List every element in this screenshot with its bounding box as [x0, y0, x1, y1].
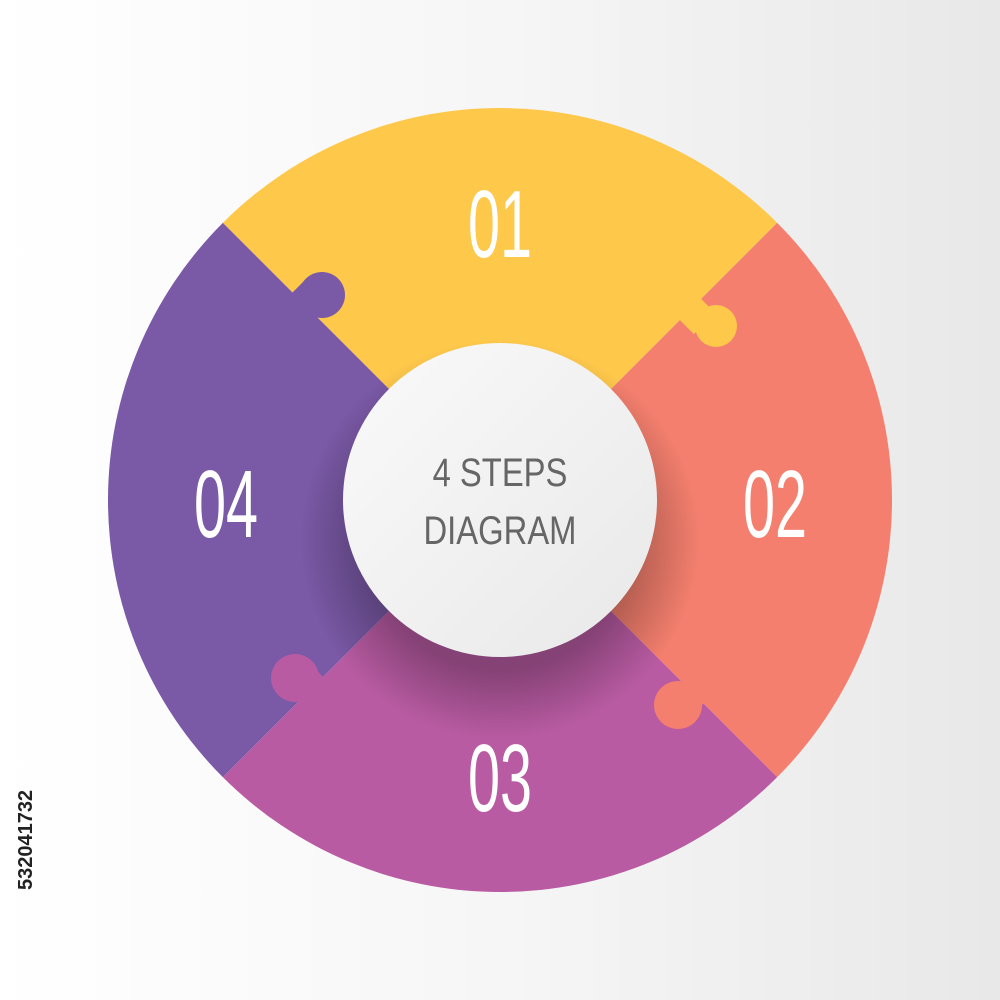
- number 01: 01: [468, 170, 532, 278]
- diagram: [18, 108, 892, 892]
- segment 01 yellow: [222, 108, 778, 389]
- center circle: [343, 343, 657, 657]
- center text: 4 STEPS: [433, 450, 567, 495]
- segment 04 purple: [108, 222, 389, 778]
- number 02: 02: [743, 450, 807, 558]
- segment 02 orange: [611, 222, 892, 778]
- number 04: 04: [194, 450, 258, 558]
- center circle: DIAGRAM: [423, 508, 577, 553]
- segment 03 magenta: [222, 611, 778, 892]
- stock id: 532041732: [15, 790, 37, 890]
- number 03: 03: [468, 724, 532, 832]
- puzzle ring: [108, 108, 892, 892]
